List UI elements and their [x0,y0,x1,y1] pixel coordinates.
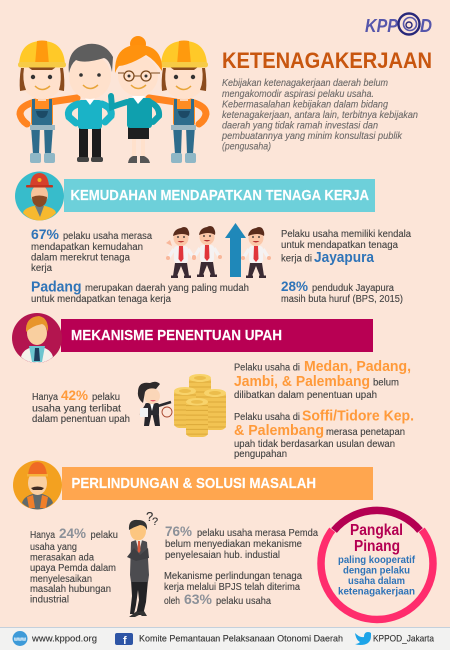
callout: Pangkal Pinang ring: ketenagakerjaan [338,586,415,598]
illustration: confused man with question marks: ? [146,509,153,524]
text: Soffi Tidore Palembang: merasa penetapan [326,427,405,438]
text: 42 percent: pelaku [92,392,120,403]
text: Padang [31,278,249,305]
text: 76 percent: penyelesaian hub. industial [165,550,280,561]
intro text: (pengusaha) [222,142,271,152]
text: 24 percent: pelaku [90,530,118,541]
illustration: confused man with question marks: ? [152,516,158,528]
callout: Pangkal Pinang ring: Pangkal [350,522,403,539]
text: 63 percent: oleh [164,596,180,607]
text: 63 percent: pelaku usaha [216,596,271,607]
text: 24 percent: upaya Pemda dalam [30,563,116,574]
text: 67 percent: mendapatkan kemudahan [31,242,143,253]
text: Soffi Tidore Palembang [234,408,414,460]
callout: Pangkal Pinang ring: Pinang [354,538,400,555]
text: 24 percent: industrial [30,594,69,606]
text: 28 percent: penduduk Jayapura [312,283,394,294]
text: Jayapura [281,229,411,266]
intro text [221,78,418,152]
intro text: Kebermasalahan kebijakan dalam bidang [222,100,388,110]
section 2 header bar: MEKANISME PENENTUAN UPAH [71,327,282,344]
text: Medan Padang Jambi Palembang [234,358,411,401]
title: KETENAGAKERJAAN [222,48,432,73]
text: 67 percent: dalam merekrut tenaga [31,252,130,264]
intro text: ketenagakerjaan, antara lain, terbitnya kebijakan [222,110,418,121]
section 3 header bar [62,467,373,500]
text: 42 percent: dalam penentuan upah [32,414,130,425]
icon: globe [12,631,28,646]
illustration: businessman with coins [138,374,226,437]
website: www.kppod.org [31,634,97,644]
figure: man in teal sweater [68,44,113,162]
footer [0,627,450,650]
text: 67 percent [31,226,152,274]
text: Medan Padang Jambi Palembang: dilibatkan dalam penentuan upah [234,390,377,401]
text: 67 percent: kerja [31,263,52,274]
icon: facebook [115,633,133,647]
text: 76 percent: pelaku usaha merasa Pemda [197,528,318,539]
text: 76 percent [165,523,318,561]
icon: office man avatar [12,313,62,363]
text: Jayapura: kerja di [281,254,312,264]
logo: KPPOD: D [420,16,432,36]
text: 42 percent: Hanya [32,392,58,403]
text: 76 percent: belum menyediakan mekanisme [165,539,302,550]
facebook page name: Komite Pemantauan Pelaksanaan Otonomi Daerah [139,634,343,644]
icon: globe: www [13,637,26,643]
text: 24 percent [30,525,118,606]
section 2 header bar [61,319,373,352]
text: Jayapura: Jayapura [314,249,375,266]
text: 63 percent: 63% [184,591,213,607]
text: Soffi Tidore Palembang: & Palembang [234,422,324,439]
text: Medan Padang Jambi Palembang: Pelaku usaha di [234,362,300,374]
logo: KPPOD: KPP [365,16,399,36]
text: 24 percent: masalah hubungan [30,584,111,595]
section 1 header bar: KEMUDAHAN MENDAPATKAN TENAGA KERJA [70,187,369,204]
text: Padang: untuk mendapatkan tenaga kerja [31,294,171,305]
icon: firefighter avatar [15,172,64,220]
text: 42 percent: usaha yang terlibat [32,404,121,414]
twitter handle: KPPOD_Jakarta [373,634,435,644]
callout: Pangkal Pinang ring: dengan pelaku [343,566,410,576]
text: Padang: Padang [31,278,82,296]
text: Jayapura: Pelaku usaha memiliki kendala [281,229,411,240]
text: 24 percent: usaha yang [30,542,77,553]
illustration: businessmen and arrow [166,223,271,278]
icon: construction worker avatar [13,460,62,510]
illustration: confused man with question marks [127,509,158,617]
text: 42 percent [32,387,130,425]
text: Medan Padang Jambi Palembang: Medan, Padang, [304,358,411,375]
icon: facebook: f [123,635,127,647]
text: Medan Padang Jambi Palembang: belum [373,378,399,388]
text: 63 percent: kerja melalui BPJS telah diterima [164,582,300,593]
callout: Pangkal Pinang ring [321,508,433,620]
callout: Pangkal Pinang ring: paling kooperatif [338,555,416,566]
text: Soffi Tidore Palembang: upah tidak berdasarkan usulan dewan [234,439,395,450]
section 1 header bar [64,179,375,212]
intro text: pembuatannya yang minim konsultasi publik [221,131,403,142]
text: 24 percent: 24% [59,525,87,541]
text: Soffi Tidore Palembang: pengupahan [234,449,287,460]
text: 24 percent: Hanya [30,530,55,541]
intro text: daerah yang tidak ramah investasi dan [222,120,378,132]
logo: KPPOD [365,14,432,36]
text: 24 percent: merasakan ada [30,552,94,564]
text: Soffi Tidore Palembang: Pelaku usaha di [234,412,300,423]
intro text: Kebijakan ketenagakerjaan daerah belum [222,78,388,89]
text: Padang: merupakan daerah yang paling mudah [85,283,249,294]
text: 63 percent: Mekanisme perlindungan tenaga [164,571,302,582]
section 3 header bar: PERLINDUNGAN & SOLUSI MASALAH [72,475,316,492]
text: 67 percent: pelaku usaha merasa [63,231,152,242]
figure: woman with glasses [111,36,162,163]
text: Medan Padang Jambi Palembang: Jambi, & Palembang [234,373,370,390]
text: 28 percent: masih buta huruf (BPS, 2015) [281,294,403,305]
text: 24 percent: menyelesaikan [30,574,92,585]
intro text: mengakomodir aspirasi pelaku usaha. [222,89,374,100]
callout: Pangkal Pinang ring: usaha dalam [348,576,405,587]
text: 42 percent: 42% [61,387,89,403]
text: 76 percent: 76% [165,523,193,539]
text: Soffi Tidore Palembang: Soffi/Tidore Kep. [302,408,414,424]
icon: twitter bird [355,632,371,645]
text: 63 percent [164,571,302,607]
text: Jayapura: untuk mendapatkan tenaga [281,240,398,251]
text: 28 percent: 28% [281,278,309,294]
text: 28 percent [281,278,403,305]
text: 67 percent: 67% [31,226,60,242]
illustration: team of workers [18,36,208,163]
